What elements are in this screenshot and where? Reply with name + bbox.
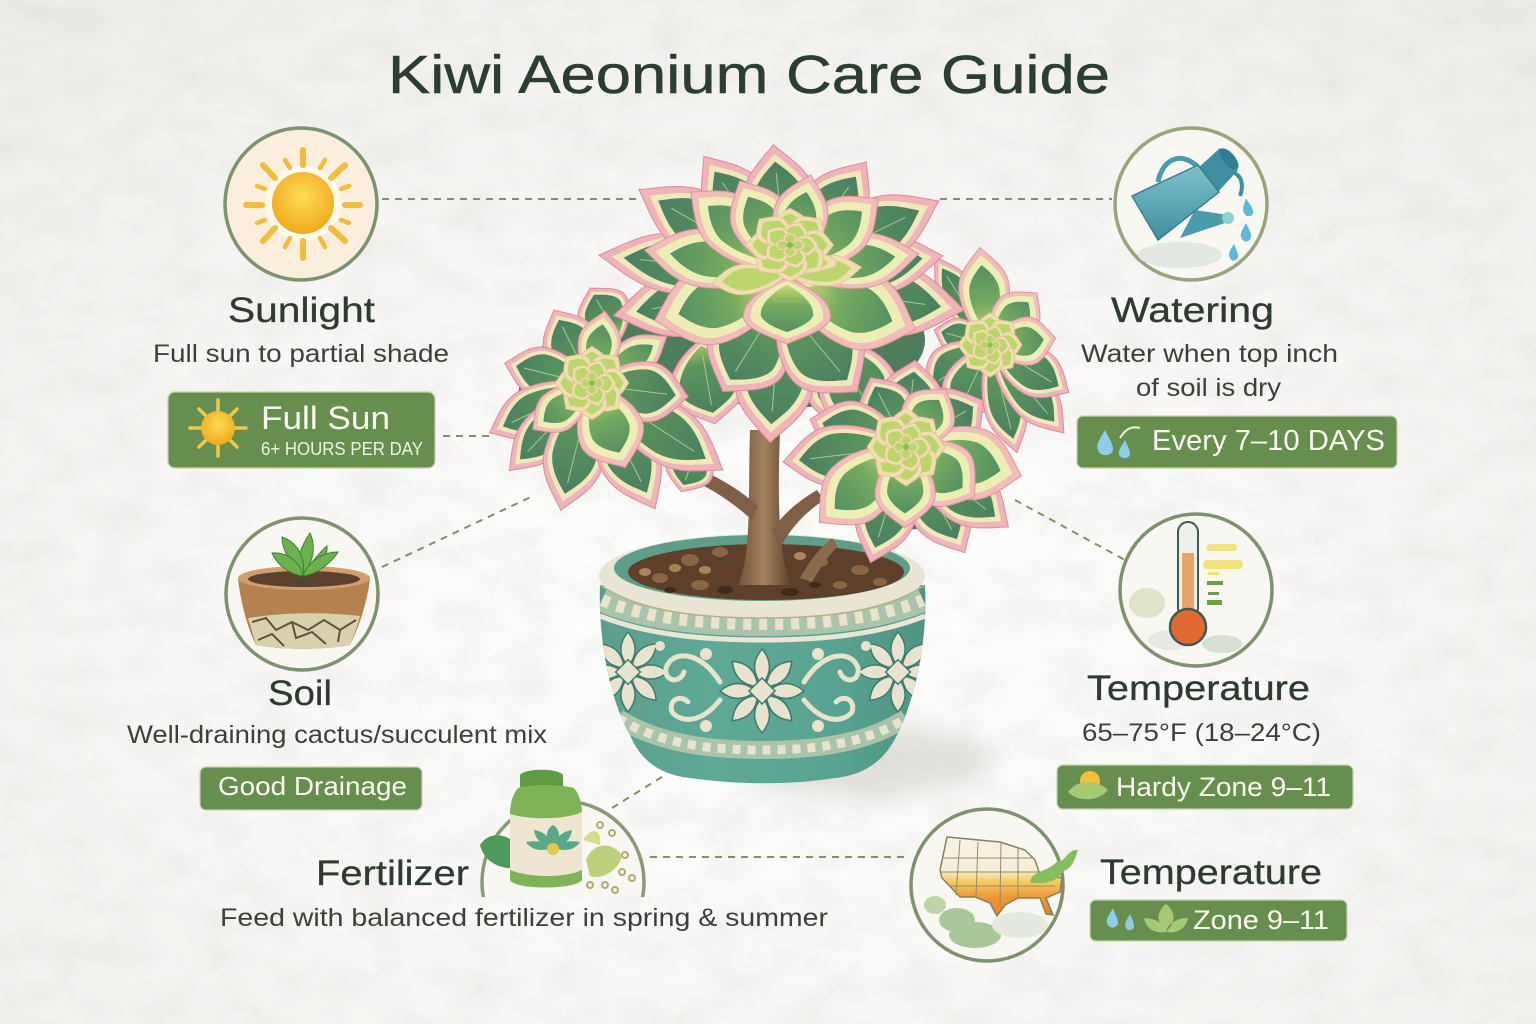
heading: Sunlight: Sunlight [228,291,375,330]
dashed connectors [382,199,1125,857]
description: Full sun to partial shade [153,340,449,368]
rosette: right [909,245,1081,458]
description: Water when top inch [1081,340,1338,368]
badge: full sun [168,392,435,468]
badge: good drainage: Good Drainage [218,771,407,801]
icon: US map [911,809,1078,961]
badge: hardy zone: Hardy Zone 9–11 [1116,772,1331,802]
pot shadow [730,722,990,798]
panel: fertilizer [222,770,828,931]
central illustration: potted plant [479,137,1081,798]
pot [588,534,938,783]
rosette: main, back tier [596,137,969,366]
dark foliage mass behind rosettes [518,187,1038,530]
icon: sun [225,128,377,280]
badge: zone 9-11: Zone 9–11 [1193,905,1329,935]
description: Well-draining cactus/succulent mix [127,721,548,749]
icon: fertilizer bottle [480,770,646,897]
icon: watering can [1115,128,1267,280]
heading: Soil: Soil [268,674,332,713]
trunk and branches [686,430,838,585]
panel: watering [1077,128,1397,468]
heading: Temperature: Temperature [1100,853,1322,892]
panel: sunlight [153,128,449,468]
heading: Temperature: Temperature [1087,669,1310,708]
badge: every 7-10 days [1077,416,1397,468]
heading: Fertilizer: Fertilizer [316,854,469,893]
rosette: left [479,298,739,522]
badge: hardy zone [1057,765,1353,809]
title: Kiwi Aeonium Care Guide [388,45,1110,105]
description line 2: of soil is dry [1136,374,1282,402]
rosette: main, upper tier [640,167,922,299]
rosette: front [779,357,1030,571]
heading: Watering: Watering [1111,291,1274,330]
panel: soil [127,518,548,810]
badge: good drainage [200,767,422,810]
badge: full sun: Full Sun [261,400,390,436]
icon: soil pot [226,518,378,670]
badge: every 7-10 days: Every 7–10 DAYS [1152,425,1385,457]
badge: zone 9-11 [1090,900,1347,941]
description: 65–75°F (18–24°C) [1082,719,1321,747]
back filler leaves [567,275,914,500]
panel: hardiness map [911,809,1347,961]
panel: temperature [1057,514,1353,809]
badge: full sun: 6+ HOURS PER DAY [261,439,423,459]
icon: thermometer [1120,514,1272,666]
soil [639,547,887,596]
description: Feed with balanced fertilizer in spring & summer [220,904,828,932]
rosette: main, lowest tier [687,273,889,445]
